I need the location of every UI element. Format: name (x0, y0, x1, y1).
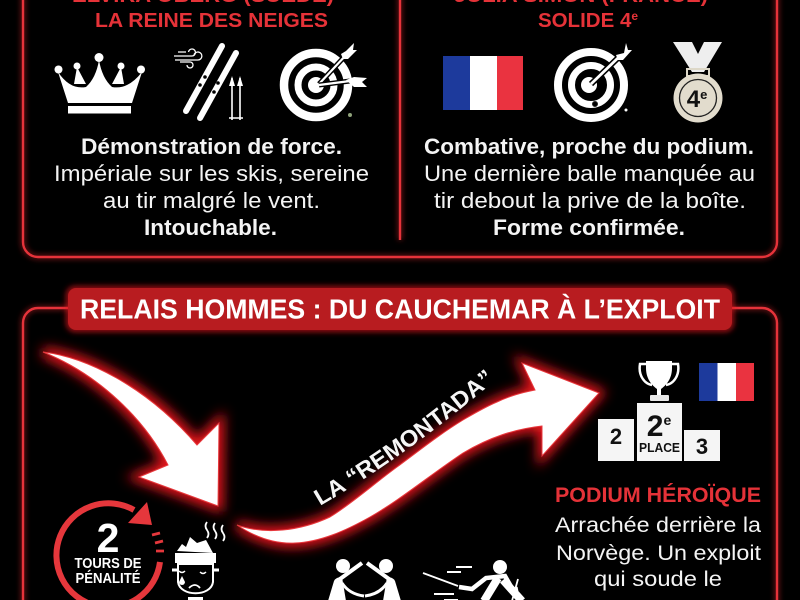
heading: right athlete: SOLIDE 4 (538, 9, 632, 32)
text: right athlete description: tir debout la prive de la boîte. (434, 188, 746, 213)
text: heroic podium: qui soude le (594, 567, 722, 591)
podium: 2 (610, 424, 622, 449)
icon: two penalty laps: PÉNALITÉ (76, 570, 141, 587)
podium: 3 (696, 434, 708, 459)
icon: fourth place medal: e (700, 87, 707, 102)
text: left athlete description: Démonstration de force. (81, 134, 342, 159)
icon: fourth place medal: 4 (687, 86, 701, 113)
heading: left athlete: LA REINE DES NEIGES (95, 9, 328, 32)
text: heroic podium: PODIUM HÉROÏQUE (555, 482, 761, 507)
icon: target with two arrows (284, 43, 367, 117)
text: heroic podium (555, 482, 761, 591)
icon: exhausted athlete (172, 522, 224, 600)
text: heroic podium: Arrachée derrière la (555, 513, 761, 537)
podium (598, 403, 720, 461)
text: right athlete description: Une dernière balle manquée au (424, 161, 755, 186)
text: left athlete description (54, 134, 369, 240)
icon: fourth place medal (673, 42, 722, 122)
label: la remontada: LA “REMONTADA” (313, 369, 487, 506)
text: left athlete description: Impériale sur les skis, sereine (54, 161, 369, 186)
icon: high five teammates (328, 559, 401, 600)
text: right athlete description: Forme confirmée. (493, 215, 685, 240)
text: left athlete description: Intouchable. (144, 215, 277, 240)
icon: speeding skier (423, 560, 522, 600)
icon: target with arrow (558, 43, 632, 118)
icon: French flag (443, 56, 523, 110)
arrow: remontada rising (237, 363, 599, 543)
text: heroic podium: Norvège. Un exploit (556, 541, 761, 565)
icon: two penalty laps: TOURS DE (74, 556, 142, 572)
icon: skis, poles and wind (174, 46, 243, 120)
icon: trophy (640, 361, 678, 401)
panel: top individual results (23, 0, 777, 257)
panel: men's relay (23, 308, 777, 600)
heading: right athlete: e (631, 9, 638, 23)
podium: PLACE (639, 440, 680, 455)
icon: crown (54, 53, 145, 114)
icon: two penalty laps (56, 502, 164, 600)
heading banner: relay: RELAIS HOMMES : DU CAUCHEMAR À L’EXPLOIT (80, 294, 720, 324)
heading banner: relay (66, 286, 734, 332)
icon: French flag small (699, 363, 754, 401)
text: left athlete description: au tir malgré le vent. (103, 188, 320, 213)
text: right athlete description (424, 134, 755, 240)
heading: right athlete (454, 0, 708, 32)
podium: e (663, 412, 671, 428)
text: right athlete description: Combative, proche du podium. (424, 134, 754, 159)
arrow: falling down (43, 352, 219, 506)
icon: two penalty laps: 2 (97, 515, 119, 561)
podium: 2 (647, 410, 663, 443)
heading: left athlete (72, 0, 334, 32)
